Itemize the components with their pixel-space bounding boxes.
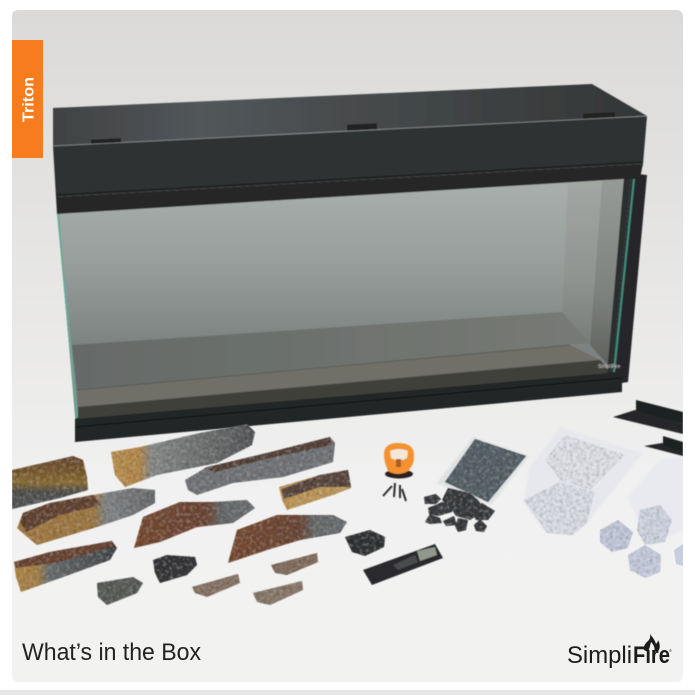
log 7 [228, 515, 347, 563]
cup window [390, 449, 408, 460]
logs [12, 424, 385, 605]
log 3 bark [204, 437, 332, 472]
tab label: Triton [20, 77, 38, 122]
remote screen [417, 547, 437, 561]
ember piece 2 [253, 581, 303, 605]
log 8 bark [14, 541, 114, 568]
rock 3 [425, 514, 442, 524]
clear glass bag [523, 427, 643, 535]
model tab [12, 40, 43, 158]
head groove [56, 162, 643, 195]
small dark log [153, 555, 197, 583]
screw 4 [402, 489, 406, 501]
bracket 2 wall [663, 436, 683, 452]
rock 6 [474, 519, 487, 532]
floor line [77, 345, 570, 390]
logo word Fire: Fire [633, 642, 670, 669]
interior back wall [566, 185, 601, 340]
green glass edge right [614, 179, 634, 372]
ember piece 3 [271, 553, 318, 575]
ember piece 1 [192, 574, 240, 597]
crystal 4 [674, 544, 683, 566]
brand logo [567, 634, 672, 669]
cup stem [396, 459, 401, 467]
page edge [0, 690, 695, 695]
log 1 [12, 456, 88, 509]
hinge right [583, 112, 615, 119]
cup base [385, 470, 413, 478]
screw 2 [394, 483, 395, 497]
bag contents [445, 439, 526, 502]
hinge centre [347, 123, 377, 131]
bracket 2 foot [644, 443, 683, 456]
logo word Simpli: Simpli [567, 642, 632, 669]
log 5 [17, 488, 155, 545]
right dark log [345, 530, 385, 556]
interior floor back [72, 312, 590, 390]
log 3 body [185, 437, 335, 495]
registered mark: ® [669, 648, 672, 653]
icon: flame [644, 634, 660, 652]
rock 1 [424, 494, 441, 504]
bracket 1 wall [636, 400, 683, 424]
cup body [384, 443, 414, 474]
rock 2 [428, 502, 454, 516]
right frame [616, 174, 648, 384]
rock 7 [442, 488, 486, 520]
title: What’s in the Box [22, 639, 201, 666]
crystal 1 [600, 520, 633, 552]
hinge left [91, 138, 121, 144]
interior side panel [590, 178, 624, 365]
log 6 [134, 500, 255, 548]
rock 5 [455, 518, 468, 532]
interior floor front [77, 345, 600, 407]
rock 4 [443, 516, 457, 526]
log 4 [279, 470, 351, 510]
second bag film [627, 456, 683, 545]
log 2 [111, 424, 255, 487]
remote control [363, 544, 443, 585]
bracket 1 foot [613, 410, 683, 434]
glass panel [50, 170, 640, 430]
bag film [523, 427, 643, 535]
large glass bag [600, 456, 683, 578]
rock 8 [470, 503, 495, 520]
log 8 [14, 541, 117, 592]
small grey log [97, 577, 143, 605]
front head [53, 116, 647, 197]
bag highlight [545, 435, 625, 490]
crystal 3 [628, 545, 661, 578]
badge on glass: SimpliFire [598, 364, 620, 370]
backing behind glass [64, 296, 78, 420]
mounting brackets [613, 400, 683, 456]
log 5 body [17, 488, 155, 545]
icon: suction cup [384, 443, 414, 478]
log 5 bark [20, 495, 101, 532]
glass body [58, 179, 632, 416]
icon: screws [383, 483, 406, 501]
base ledge [75, 372, 622, 442]
fireplace unit [50, 84, 647, 442]
screw 3 [399, 485, 401, 498]
remote buttons [393, 555, 418, 570]
crystal 2 [637, 505, 672, 545]
tab background [12, 40, 43, 158]
screw 1 [383, 486, 392, 496]
glass spill [524, 482, 595, 535]
remote body [363, 544, 443, 585]
log 8 body [14, 541, 117, 592]
log 3 [185, 437, 335, 495]
log 4 bark [281, 470, 351, 499]
bag film [437, 437, 529, 505]
floor front shadow [78, 360, 612, 420]
log 4 wood [279, 470, 351, 510]
top face [53, 84, 647, 146]
black glass pile [424, 488, 495, 532]
inner dark strip [607, 177, 632, 374]
base groove [75, 378, 622, 427]
black glass bag [437, 437, 529, 505]
head lower band [56, 164, 643, 214]
head highlight [53, 116, 647, 146]
green glass edge left [58, 214, 77, 418]
